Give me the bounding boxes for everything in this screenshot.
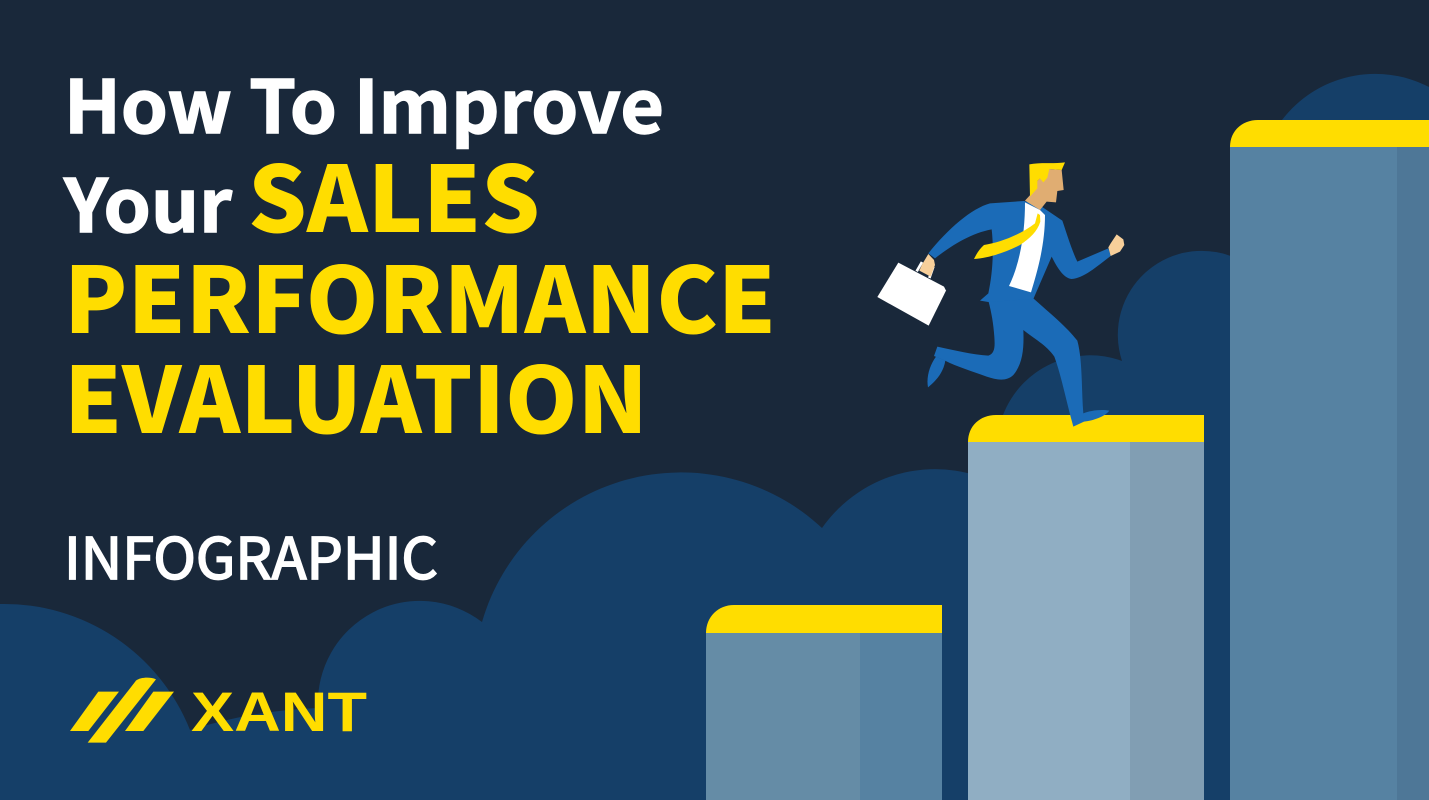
title: SALES bbox=[248, 127, 540, 259]
illustration: running businessman bbox=[877, 162, 1124, 427]
logo wordmark: XANT bbox=[191, 680, 367, 743]
title: PERFORMANCE bbox=[64, 228, 776, 360]
shirt bbox=[1009, 202, 1045, 292]
bar: tall step bbox=[1230, 120, 1429, 800]
jacket and arms bbox=[928, 201, 1111, 302]
subtitle: infographic: INFOGRAPHIC bbox=[64, 514, 438, 596]
briefcase bbox=[877, 262, 946, 326]
back shoe bbox=[927, 357, 945, 387]
icon: logo stripes bbox=[70, 678, 174, 743]
bar: low step bbox=[706, 605, 942, 800]
title: Your bbox=[63, 148, 232, 254]
logo: XANT bbox=[70, 678, 367, 743]
front hand bbox=[1108, 234, 1124, 256]
head bbox=[1025, 162, 1065, 210]
tie bbox=[974, 213, 1040, 259]
title: EVALUATION bbox=[64, 328, 648, 460]
title bbox=[63, 49, 776, 460]
legs bbox=[934, 298, 1109, 427]
back hand bbox=[919, 254, 935, 277]
title: How To Improve bbox=[64, 49, 664, 155]
bar: middle step bbox=[968, 415, 1204, 800]
